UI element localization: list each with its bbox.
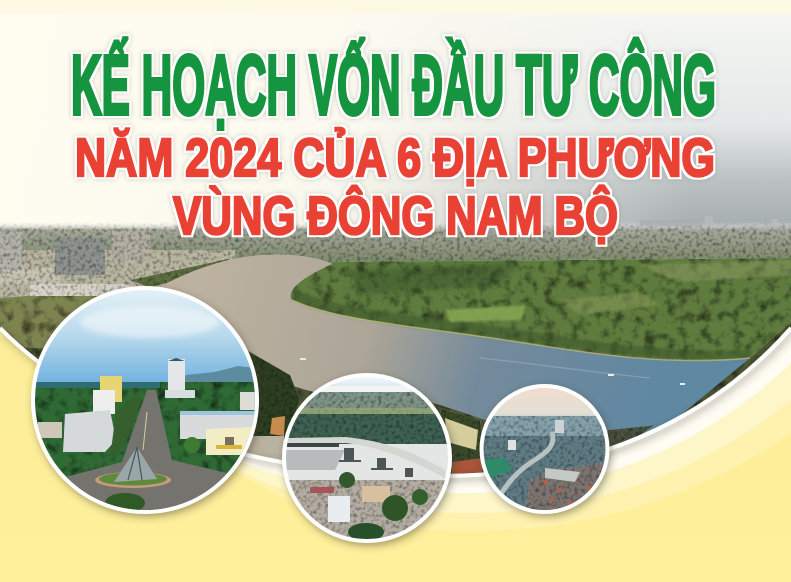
river reflections and boats — [300, 358, 685, 385]
top cream strip — [0, 0, 791, 15]
white rim of photo curve — [0, 328, 791, 476]
bridge — [284, 437, 445, 478]
tower — [168, 359, 185, 391]
lower land base — [0, 262, 791, 482]
circle photo: bridge over river — [282, 373, 452, 545]
highway — [500, 432, 553, 495]
title line 3: VÙNG ĐÔNG NAM BỘ — [173, 185, 618, 246]
circle photo: city roundabout — [30, 286, 260, 520]
curved cream bands — [233, 300, 791, 531]
river — [150, 255, 750, 440]
houses — [289, 480, 445, 539]
title — [71, 38, 716, 246]
left high-rise towers — [0, 229, 150, 275]
right bank forest — [291, 258, 791, 361]
roundabout with pyramid — [95, 472, 171, 488]
left bank land and town — [0, 250, 235, 350]
distant city on horizon — [0, 216, 791, 264]
circle photo: aerial city with highway — [480, 384, 610, 516]
right buildings — [180, 413, 254, 439]
left buildings — [100, 376, 122, 402]
sky — [0, 14, 791, 239]
street — [66, 390, 228, 510]
lower bank trees and buildings — [245, 352, 655, 474]
